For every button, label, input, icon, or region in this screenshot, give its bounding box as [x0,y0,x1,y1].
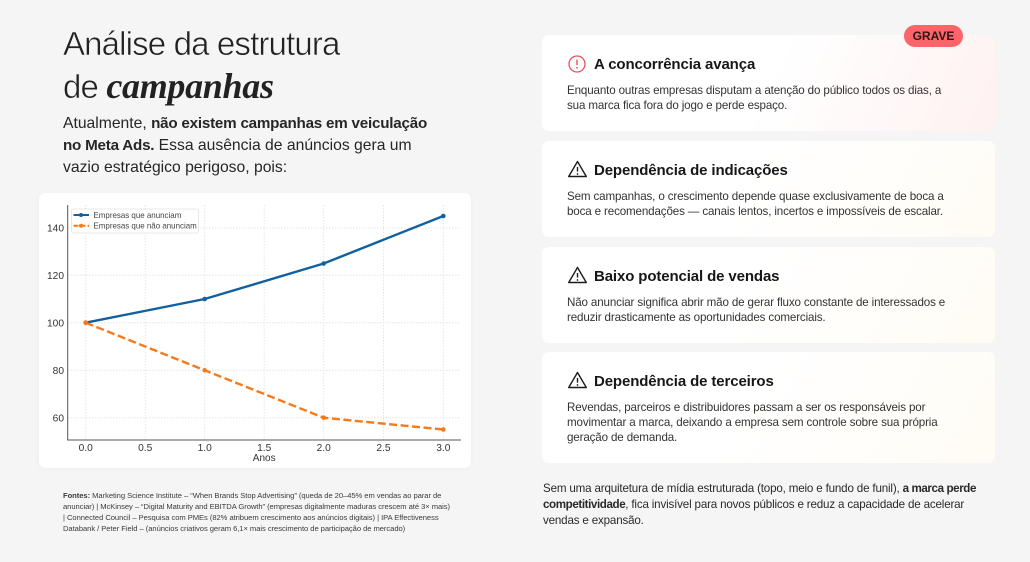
description [567,190,944,218]
badge: grave [904,25,963,47]
y axis labels: 120 [47,271,64,282]
chart legend: Empresas que não anunciam [94,222,197,231]
title: de campanhas [63,66,274,106]
line chart [47,205,461,464]
panel: a concorrência avança [542,35,995,131]
x axis labels [79,443,451,454]
description: Sem campanhas, o crescimento depende quase exclusivamente de boca a [567,190,944,203]
heading: Dependência de terceiros [594,373,774,390]
icon: warning triangle [568,372,587,388]
conclusion text [543,482,976,527]
y axis labels: 80 [53,366,64,377]
x axis labels: 1.5 [257,443,272,454]
description: Não anunciar significa abrir mão de gerar fluxo constante de interessados e [567,296,945,309]
panel: line chart [39,193,471,468]
description: movimentar a marca, deixando a empresa sem controle sobre sua própria [567,416,938,429]
description: reduzir drasticamente as oportunidades comerciais. [567,311,826,324]
sources note: Fontes: Marketing Science Institute – “When Brands Stop Advertising” (queda de 20–45% em vendas ao parar de [63,490,441,500]
y axis labels: 100 [47,318,64,329]
chart legend: Empresas que anunciam [94,211,182,220]
description: Revendas, parceiros e distribuidores passam a ser os responsáveis por [567,401,925,414]
icon: warning triangle [568,160,587,178]
y axis labels [47,224,64,424]
description [567,401,938,444]
series: empresas que anunciam [86,214,446,323]
panel: dependência de terceiros [542,352,995,463]
conclusion text: Sem uma arquitetura de mídia estruturada (topo, meio e fundo de funil), a marca perde [543,482,976,495]
sources note [63,490,450,532]
description: geração de demanda. [567,431,677,444]
x axis labels: 0.0 [79,443,93,454]
x axis labels: 3.0 [436,443,451,454]
sources note: Databank / Peter Field – (anúncios criativos geram 6,1× mais crescimento de participação de mercado) [63,524,405,532]
series: empresas que não anunciam [83,320,446,432]
intro text: Atualmente, não existem campanhas em veiculação [63,115,427,132]
heading: Baixo potencial de vendas [594,268,779,285]
panel: dependência de indicações [542,141,995,237]
sources note: | Connected Council – Pesquisa com PMEs (82% atribuem crescimento aos anúncios digitais) | IPA Effectiveness [63,512,439,522]
intro text [63,115,427,176]
x axis labels: 2.5 [376,443,391,454]
badge: grave: GRAVE [913,29,954,43]
x axis labels: 2.0 [317,443,331,454]
description: Enquanto outras empresas disputam a atenção do público todos os dias, a [567,84,941,97]
intro text: no Meta Ads. Essa ausência de anúncios gera um [63,137,412,154]
icon: alert circle [568,55,586,73]
conclusion text: vendas e expansão. [543,514,644,527]
x axis labels: 0.5 [138,443,153,454]
panel: baixo potencial de vendas [542,247,995,343]
chart axes [68,205,461,440]
x axis title: Anos [253,453,276,464]
description [567,296,945,324]
chart legend [72,209,198,233]
description [567,84,942,112]
description: sua marca fica fora do jogo e perde espaço. [567,99,787,112]
heading: Dependência de indicações [594,162,788,179]
intro text: vazio estratégico perigoso, pois: [63,159,287,176]
x axis labels: 1.0 [198,443,212,454]
heading: A concorrência avança [594,56,755,73]
conclusion text: competitividade, fica invisível para novos públicos e reduz a capacidade de acelerar [543,498,964,511]
title [63,25,340,106]
icon: warning triangle [568,266,587,284]
description: boca e recomendações — canais lentos, incertos e impossíveis de escalar. [567,205,943,218]
y axis labels: 140 [47,224,64,234]
title: Análise da estrutura [63,25,340,62]
sources note: anunciar) | McKinsey – “Digital Maturity and EBITDA Growth” (empresas digitalmente maduras crescem até 3× mais) [63,502,450,510]
y axis labels: 60 [53,413,64,424]
